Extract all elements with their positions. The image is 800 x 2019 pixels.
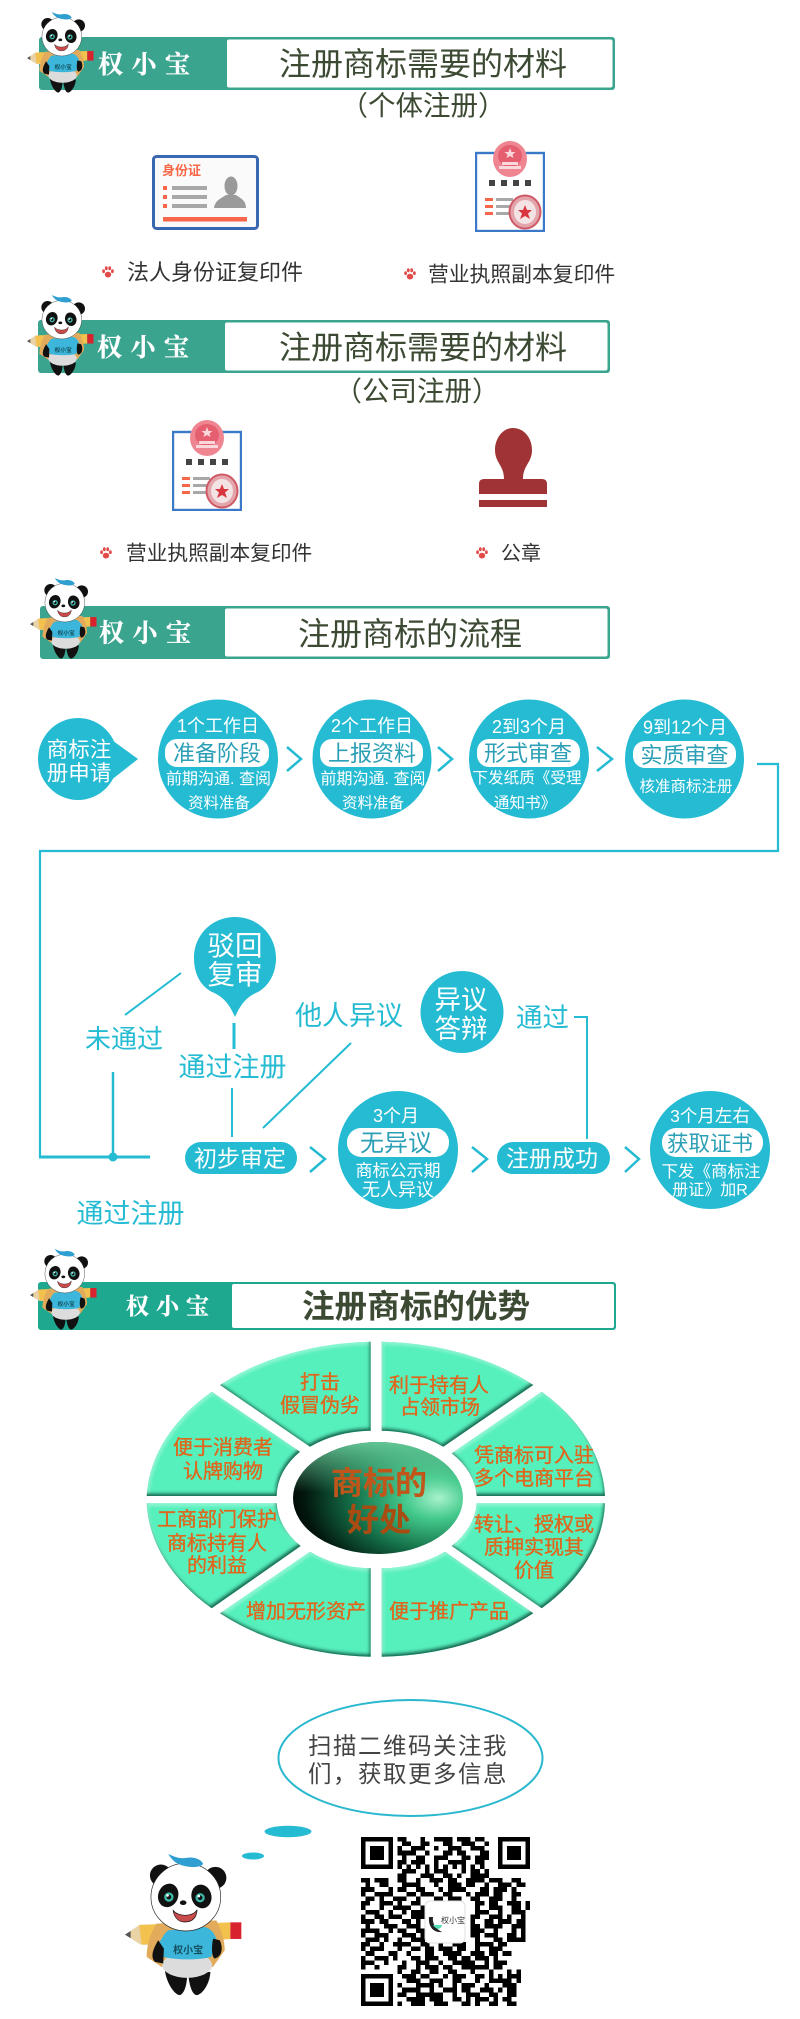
step: 无异议	[338, 1091, 458, 1209]
heading bar: 注册商标的流程: 注册商标的流程	[298, 616, 522, 652]
label: 通过注册 (upper): 通过注册	[178, 1052, 286, 1082]
heading bar: 注册商标的优势	[38, 1282, 616, 1330]
heading bar: 注册商标需要的材料（个体注册）: 注册商标需要的材料	[279, 46, 567, 82]
step: 形式审查: 形式审查	[484, 741, 572, 766]
segment: 增加无形资产: 增加无形资产	[246, 1600, 366, 1623]
icon: panda mascot	[30, 578, 97, 659]
segment: 工商部门保护商标持有人的利益: 商标持有人	[167, 1532, 267, 1555]
heading bar: 注册商标需要的材料（公司注册）	[38, 320, 610, 373]
segment: 凭商标可入驻多个电商平台: 凭商标可入驻	[474, 1444, 594, 1467]
segment: 便于消费者认牌购物	[147, 1392, 300, 1496]
segment: 转让、授权或质押实现其价值	[452, 1503, 605, 1608]
segment: 转让、授权或质押实现其价值: 质押实现其	[484, 1536, 584, 1559]
speech bubble: 扫描二维码关注我们: 扫描二维码关注我	[308, 1733, 508, 1759]
icon: business license	[173, 420, 241, 510]
circle: 异议答辩	[420, 971, 504, 1053]
circle: 异议答辩: 异议	[434, 985, 488, 1015]
step: 准备阶段: 资料准备	[188, 794, 250, 812]
step: 准备阶段: 准备阶段	[173, 741, 261, 766]
pill: 注册成功	[497, 1142, 610, 1174]
pill: 注册成功: 注册成功	[506, 1146, 598, 1172]
heading bar: 注册商标的优势: 注册商标的优势	[302, 1288, 530, 1324]
arrow	[625, 1147, 639, 1172]
arrow	[438, 747, 452, 771]
segment: 转让、授权或质押实现其价值: 转让、授权或	[474, 1513, 594, 1536]
label: 公章	[476, 542, 541, 565]
segment: 工商部门保护商标持有人的利益: 工商部门保护	[157, 1508, 277, 1531]
connector line: back to lower row	[39, 764, 778, 1157]
label: 营业执照副本复印件: 营业执照副本复印件	[126, 542, 312, 565]
pin: 驳回复审: 复审	[208, 959, 262, 990]
label: 通过: 通过	[516, 1003, 569, 1033]
label: 营业执照副本复印件: 营业执照副本复印件	[428, 264, 615, 286]
flow start: 商标注册申请	[38, 718, 138, 800]
step: 上报资料: 资料准备	[342, 794, 404, 812]
step: 形式审查: 通知书》	[494, 794, 556, 812]
heading bar: 注册商标需要的材料（公司注册）: 权小宝	[97, 333, 198, 362]
label: 通过	[516, 1003, 587, 1139]
speech bubble: 扫描二维码关注我们	[278, 1700, 542, 1816]
label: 未通过	[85, 973, 181, 1162]
pill: 初步审定	[185, 1142, 297, 1174]
wheel chart: 商标的好处	[147, 1342, 605, 1657]
heading bar: 注册商标的流程: 权小宝	[99, 618, 200, 648]
segment: 便于推广产品	[382, 1552, 533, 1657]
label: 法人身份证复印件: 法人身份证复印件	[127, 260, 303, 285]
flow start: 商标注册申请: 商标注	[47, 738, 111, 762]
center: 商标的好处: 商标的	[331, 1465, 427, 1501]
pin: 驳回复审: 驳回	[208, 930, 262, 961]
icon: large panda mascot	[125, 1854, 241, 1995]
icon: panda mascot	[27, 12, 94, 93]
arrow	[287, 747, 301, 771]
segment: 打击假冒伪劣: 假冒伪劣	[280, 1394, 360, 1417]
step: 上报资料	[312, 700, 432, 818]
step: 形式审查: 2到3个月	[492, 717, 566, 737]
QR code	[361, 1837, 535, 2006]
step: 准备阶段	[158, 700, 278, 818]
segment: 打击假冒伪劣: 打击	[300, 1371, 340, 1394]
arrow	[310, 1147, 325, 1172]
thought bubble dots	[242, 1826, 312, 1860]
step: 无异议: 无异议	[360, 1130, 432, 1157]
arrow	[472, 1147, 487, 1172]
segment: 转让、授权或质押实现其价值: 价值	[514, 1559, 554, 1582]
step: 实质审查: 实质审查	[640, 743, 729, 768]
step: 无异议: 商标公示期	[356, 1162, 440, 1180]
step: 实质审查	[625, 700, 744, 818]
QR centre logo	[425, 1901, 465, 1943]
step: 无异议: 3个月	[373, 1106, 419, 1126]
flow start: 商标注册申请: 册申请	[47, 762, 111, 786]
speech bubble: 扫描二维码关注我们: 们，获取更多信息	[308, 1761, 508, 1787]
center: 商标的好处: 好处	[347, 1502, 411, 1538]
step: 上报资料: 上报资料	[328, 741, 416, 766]
icon: panda mascot	[27, 295, 94, 376]
step: 获取证书: 册证》加R	[672, 1181, 748, 1199]
heading bar: 注册商标需要的材料（个体注册）	[39, 37, 615, 90]
label: 通过注册 (lower): 通过注册	[76, 1199, 184, 1229]
center: 商标的好处	[293, 1442, 463, 1554]
label: 通过注册 (upper)	[178, 1023, 286, 1137]
step: 获取证书: 3个月左右	[670, 1106, 750, 1126]
step: 准备阶段: 前期沟通. 查阅	[166, 770, 271, 788]
icon: company stamp	[479, 428, 547, 507]
label: 未通过: 未通过	[85, 1024, 163, 1054]
icon: ID card: 身份证	[162, 163, 201, 178]
pin: 驳回复审	[194, 917, 276, 1017]
QR centre logo: 权小宝	[441, 1915, 465, 1925]
segment: 打击假冒伪劣	[220, 1342, 371, 1447]
step: 实质审查: 核准商标注册	[639, 778, 733, 796]
icon: business license	[476, 141, 544, 231]
pill: 初步审定: 初步审定	[194, 1146, 286, 1172]
segment: 利于持有人占领市场: 占领市场	[400, 1396, 480, 1419]
segment: 便于消费者认牌购物: 便于消费者	[173, 1436, 273, 1459]
circle: 异议答辩: 答辩	[434, 1014, 488, 1044]
step: 上报资料: 2个工作日	[331, 716, 413, 736]
label: 公章: 公章	[501, 542, 541, 565]
segment: 工商部门保护商标持有人的利益	[147, 1503, 301, 1608]
segment: 凭商标可入驻多个电商平台	[452, 1392, 605, 1496]
subheading: 公司注册: （公司注册）	[334, 376, 500, 406]
segment: 凭商标可入驻多个电商平台: 多个电商平台	[474, 1467, 594, 1490]
step: 实质审查: 9到12个月	[643, 718, 727, 738]
step: 形式审查: 下发纸质《受理	[472, 769, 582, 787]
segment: 工商部门保护商标持有人的利益: 的利益	[187, 1554, 247, 1577]
icon: ID card	[154, 156, 258, 228]
step: 形式审查	[469, 700, 589, 818]
step: 获取证书: 下发《商标注	[662, 1162, 760, 1181]
step: 获取证书: 获取证书	[667, 1132, 753, 1156]
segment: 便于推广产品: 便于推广产品	[389, 1600, 509, 1623]
subheading: 个体注册: （个体注册）	[340, 90, 506, 121]
segment: 便于消费者认牌购物: 认牌购物	[183, 1460, 263, 1483]
segment: 利于持有人占领市场: 利于持有人	[389, 1374, 489, 1397]
label: 他人异议	[263, 1001, 403, 1128]
step: 准备阶段: 1个工作日	[177, 716, 259, 736]
step: 上报资料: 前期沟通. 查阅	[321, 770, 425, 788]
heading bar: 注册商标的流程	[40, 606, 610, 659]
heading bar: 注册商标的优势: 权小宝	[126, 1294, 216, 1319]
arrow	[597, 747, 612, 771]
icon: panda mascot	[30, 1249, 97, 1330]
label: 他人异议: 他人异议	[295, 1001, 403, 1031]
step: 无异议: 无人异议	[362, 1180, 434, 1200]
segment: 增加无形资产	[220, 1552, 371, 1657]
segment: 利于持有人占领市场	[382, 1342, 533, 1447]
heading bar: 注册商标需要的材料（公司注册）: 注册商标需要的材料	[279, 330, 567, 366]
step: 获取证书	[650, 1091, 770, 1209]
heading bar: 注册商标需要的材料（个体注册）: 权小宝	[98, 50, 199, 79]
